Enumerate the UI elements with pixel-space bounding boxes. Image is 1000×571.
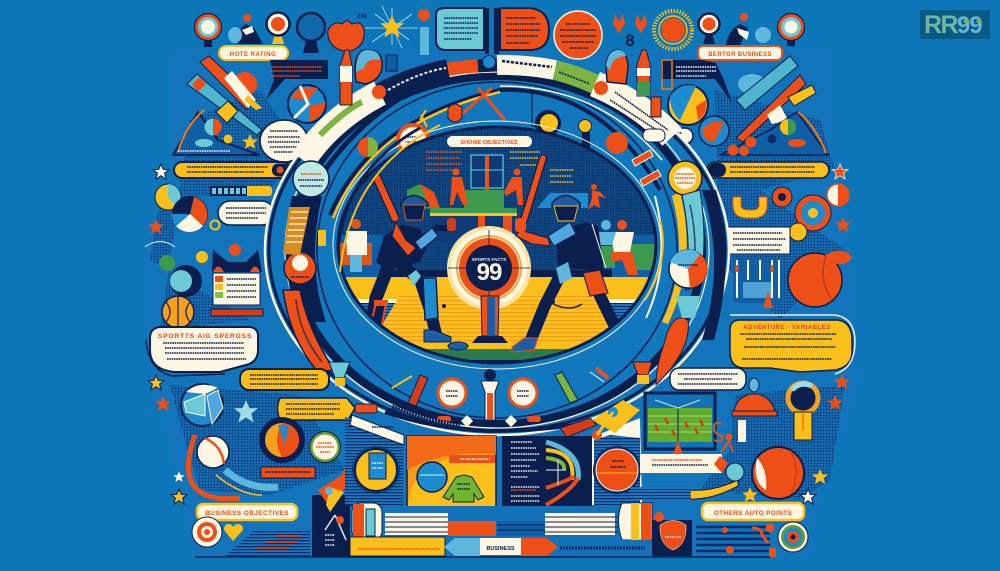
- icon: ring lamp right: [778, 14, 804, 46]
- central stump: [472, 296, 508, 343]
- figure dome: [732, 378, 777, 442]
- orange shirt panel: [407, 436, 496, 507]
- torso: [376, 224, 428, 268]
- icon: mesh circle: [297, 13, 325, 53]
- helmet: [552, 196, 580, 207]
- big orange ball top right: [788, 251, 852, 307]
- target with 99: [447, 226, 531, 310]
- heading in scene: [447, 136, 532, 147]
- basketball: [162, 296, 194, 328]
- central rings: [265, 65, 729, 435]
- bottom ring items: [385, 368, 608, 437]
- bottom ring dark stripe: [385, 407, 600, 437]
- back leg: [584, 269, 618, 328]
- triangle panel left: [173, 110, 260, 155]
- watermark logo: RR: [924, 11, 959, 39]
- checklist panel: [211, 273, 263, 316]
- small ring icons: [437, 415, 541, 427]
- bats on ring: [392, 368, 608, 406]
- icon: green shirt: [443, 475, 484, 502]
- speech oval: [260, 120, 308, 162]
- bottom right capsule: [618, 503, 652, 540]
- outline bottom: [195, 556, 770, 558]
- torso: [556, 222, 604, 270]
- icon: figure right: [726, 13, 771, 45]
- right batter: [512, 154, 618, 352]
- callout: yellow: [730, 315, 855, 374]
- orange text circle in ring: [398, 125, 428, 155]
- trophy bottle: [481, 369, 499, 420]
- heading banner lower right: OTHERS AUTO POINTS: [714, 510, 793, 517]
- heart: [224, 524, 243, 541]
- heading banner left: HOTE RATING: [230, 52, 276, 58]
- heading in scene: SHOWE OBJECTIVES: [460, 140, 518, 146]
- striped label: [283, 207, 326, 255]
- capsule and bottle right: [606, 50, 661, 117]
- shield panel: [652, 512, 692, 556]
- helmet: [401, 196, 428, 206]
- back leg: [367, 266, 395, 316]
- ground: [346, 277, 648, 360]
- speech pill left: [218, 201, 274, 225]
- yellow ball with frame: [532, 92, 580, 150]
- figure ring: [788, 383, 818, 440]
- wedge panel right: [592, 418, 642, 505]
- crossed bats: [420, 88, 505, 127]
- cream pill: [670, 368, 746, 390]
- right ring: orange swoosh: [656, 296, 700, 385]
- icon: crossed bat and pen: [187, 56, 262, 135]
- cream text panel right: [726, 227, 790, 254]
- shoes: [512, 338, 538, 352]
- top right ornaments: 200: [357, 14, 368, 20]
- target with 99: 99: [477, 259, 502, 286]
- orange label: [261, 467, 315, 478]
- right ring: cyan panel: [682, 190, 704, 290]
- navy text panel: [502, 436, 592, 508]
- orange curved panel: [283, 290, 334, 372]
- arms: [392, 222, 416, 256]
- net and cones: [733, 258, 783, 308]
- balls on ring: [358, 120, 665, 186]
- side crowd players: [346, 219, 638, 275]
- label circle right: [509, 379, 537, 407]
- orange label circle: [284, 252, 316, 284]
- callout: yellow: ADVENTURE - VARIABLES: [743, 325, 831, 331]
- icon: cheering figure: [212, 244, 262, 272]
- field panel: [645, 393, 715, 454]
- bat: [377, 178, 395, 218]
- heading banner right: BERTOR BUSINESS: [708, 52, 772, 58]
- background players: [450, 168, 606, 210]
- icon: post: [418, 9, 430, 55]
- target: [192, 517, 222, 547]
- navy panel right: [661, 60, 732, 103]
- circle with orange arcs: [259, 417, 305, 463]
- front leg: [400, 264, 436, 334]
- speech pill right: [642, 128, 693, 144]
- top centre items: [328, 6, 665, 186]
- yellow pill: [240, 369, 329, 390]
- left lower cluster: [146, 164, 377, 557]
- baseball swoosh: [188, 435, 278, 499]
- arms: [516, 230, 550, 246]
- orange text circle: [554, 11, 602, 59]
- big orange ball lower: [752, 447, 804, 499]
- yellow bar right: [707, 162, 829, 178]
- icon: lamp globe right: [698, 14, 720, 44]
- bottom panels: [345, 400, 652, 556]
- icon: pen and bat right: [736, 56, 816, 142]
- outer top band: [303, 56, 672, 218]
- bottom left capsule: [352, 503, 382, 540]
- triangle panel right: [720, 112, 828, 155]
- heading banner lower left: [197, 504, 297, 520]
- front leg: [530, 266, 565, 342]
- arrow banner: BUSINESS: [486, 546, 515, 552]
- top right ornaments: 8: [625, 31, 635, 50]
- watermark logo: 99: [957, 12, 982, 39]
- yellow tag: [278, 398, 377, 420]
- icon: star burst: [365, 6, 418, 71]
- yellow wedge connector: [592, 400, 640, 440]
- icon: figure with cap: [228, 14, 263, 44]
- heading banner lower left: BUSINESS OBJECTIVES: [205, 510, 289, 517]
- stadium backdrop: [340, 184, 655, 277]
- navy speech panel: [266, 60, 328, 100]
- open book panel: [436, 8, 549, 54]
- teal label circle: [293, 161, 329, 197]
- label circle left: [438, 379, 466, 407]
- heading banner left: [219, 46, 288, 60]
- watermark logo: [920, 10, 990, 39]
- balls right: [668, 85, 756, 156]
- bottom ring: trophy pieces: [329, 362, 350, 386]
- wedge panel left: [345, 415, 404, 505]
- central scene: [340, 128, 654, 362]
- icon: lamp globe: [266, 12, 290, 44]
- navy figure panel: [312, 462, 364, 557]
- yellow circle label: [668, 161, 702, 195]
- ball: [288, 85, 326, 123]
- cricket frame: [471, 155, 503, 190]
- bottom strip: [350, 506, 652, 538]
- shoes: [357, 345, 372, 358]
- spiral circle: [778, 522, 808, 552]
- icon: sun: [654, 11, 692, 49]
- cream strip: [640, 454, 722, 473]
- bat: [524, 158, 543, 220]
- stars right: [742, 164, 851, 504]
- volleyball: [181, 384, 223, 426]
- inner ring outline: [333, 121, 663, 369]
- top right icons: [642, 11, 852, 308]
- green circle label: [310, 432, 340, 462]
- pie charts left: [155, 184, 208, 232]
- icon: lower left balls: [145, 220, 220, 297]
- yellow paddle: [690, 463, 744, 499]
- blue bar bottom: [555, 540, 650, 556]
- callout: sports and services: SPORTTS AIG SPEROSS: [158, 333, 252, 340]
- right ring: cup: [633, 362, 652, 384]
- orange letter figure: [714, 423, 733, 473]
- progress bar: [210, 186, 272, 196]
- callout: sports and services: [146, 327, 258, 376]
- top left icons: [145, 12, 328, 316]
- scene captions: [426, 152, 574, 182]
- yellow bar left: [174, 162, 290, 178]
- icon: magnet and float: [733, 184, 849, 241]
- side ring labels: [283, 161, 707, 386]
- top right ornaments: [357, 14, 647, 50]
- stair stripes: [225, 530, 310, 556]
- right lower cluster: [630, 164, 855, 557]
- halftone backing: [145, 50, 860, 556]
- capsule left: [355, 50, 382, 84]
- pie label circle: [669, 250, 707, 288]
- heading banner right: [698, 46, 782, 60]
- heading banner lower right: [702, 503, 804, 520]
- icon: ring lamp: [194, 14, 222, 47]
- arrow banner: [444, 538, 558, 556]
- stars left: [148, 164, 258, 504]
- lower right stripes and players: [630, 487, 776, 557]
- target with 99: SPORTS FACTS: [472, 257, 506, 262]
- yellow bar bottom: [350, 537, 445, 556]
- left batter: [367, 174, 468, 350]
- flower and bottle left: [328, 20, 364, 105]
